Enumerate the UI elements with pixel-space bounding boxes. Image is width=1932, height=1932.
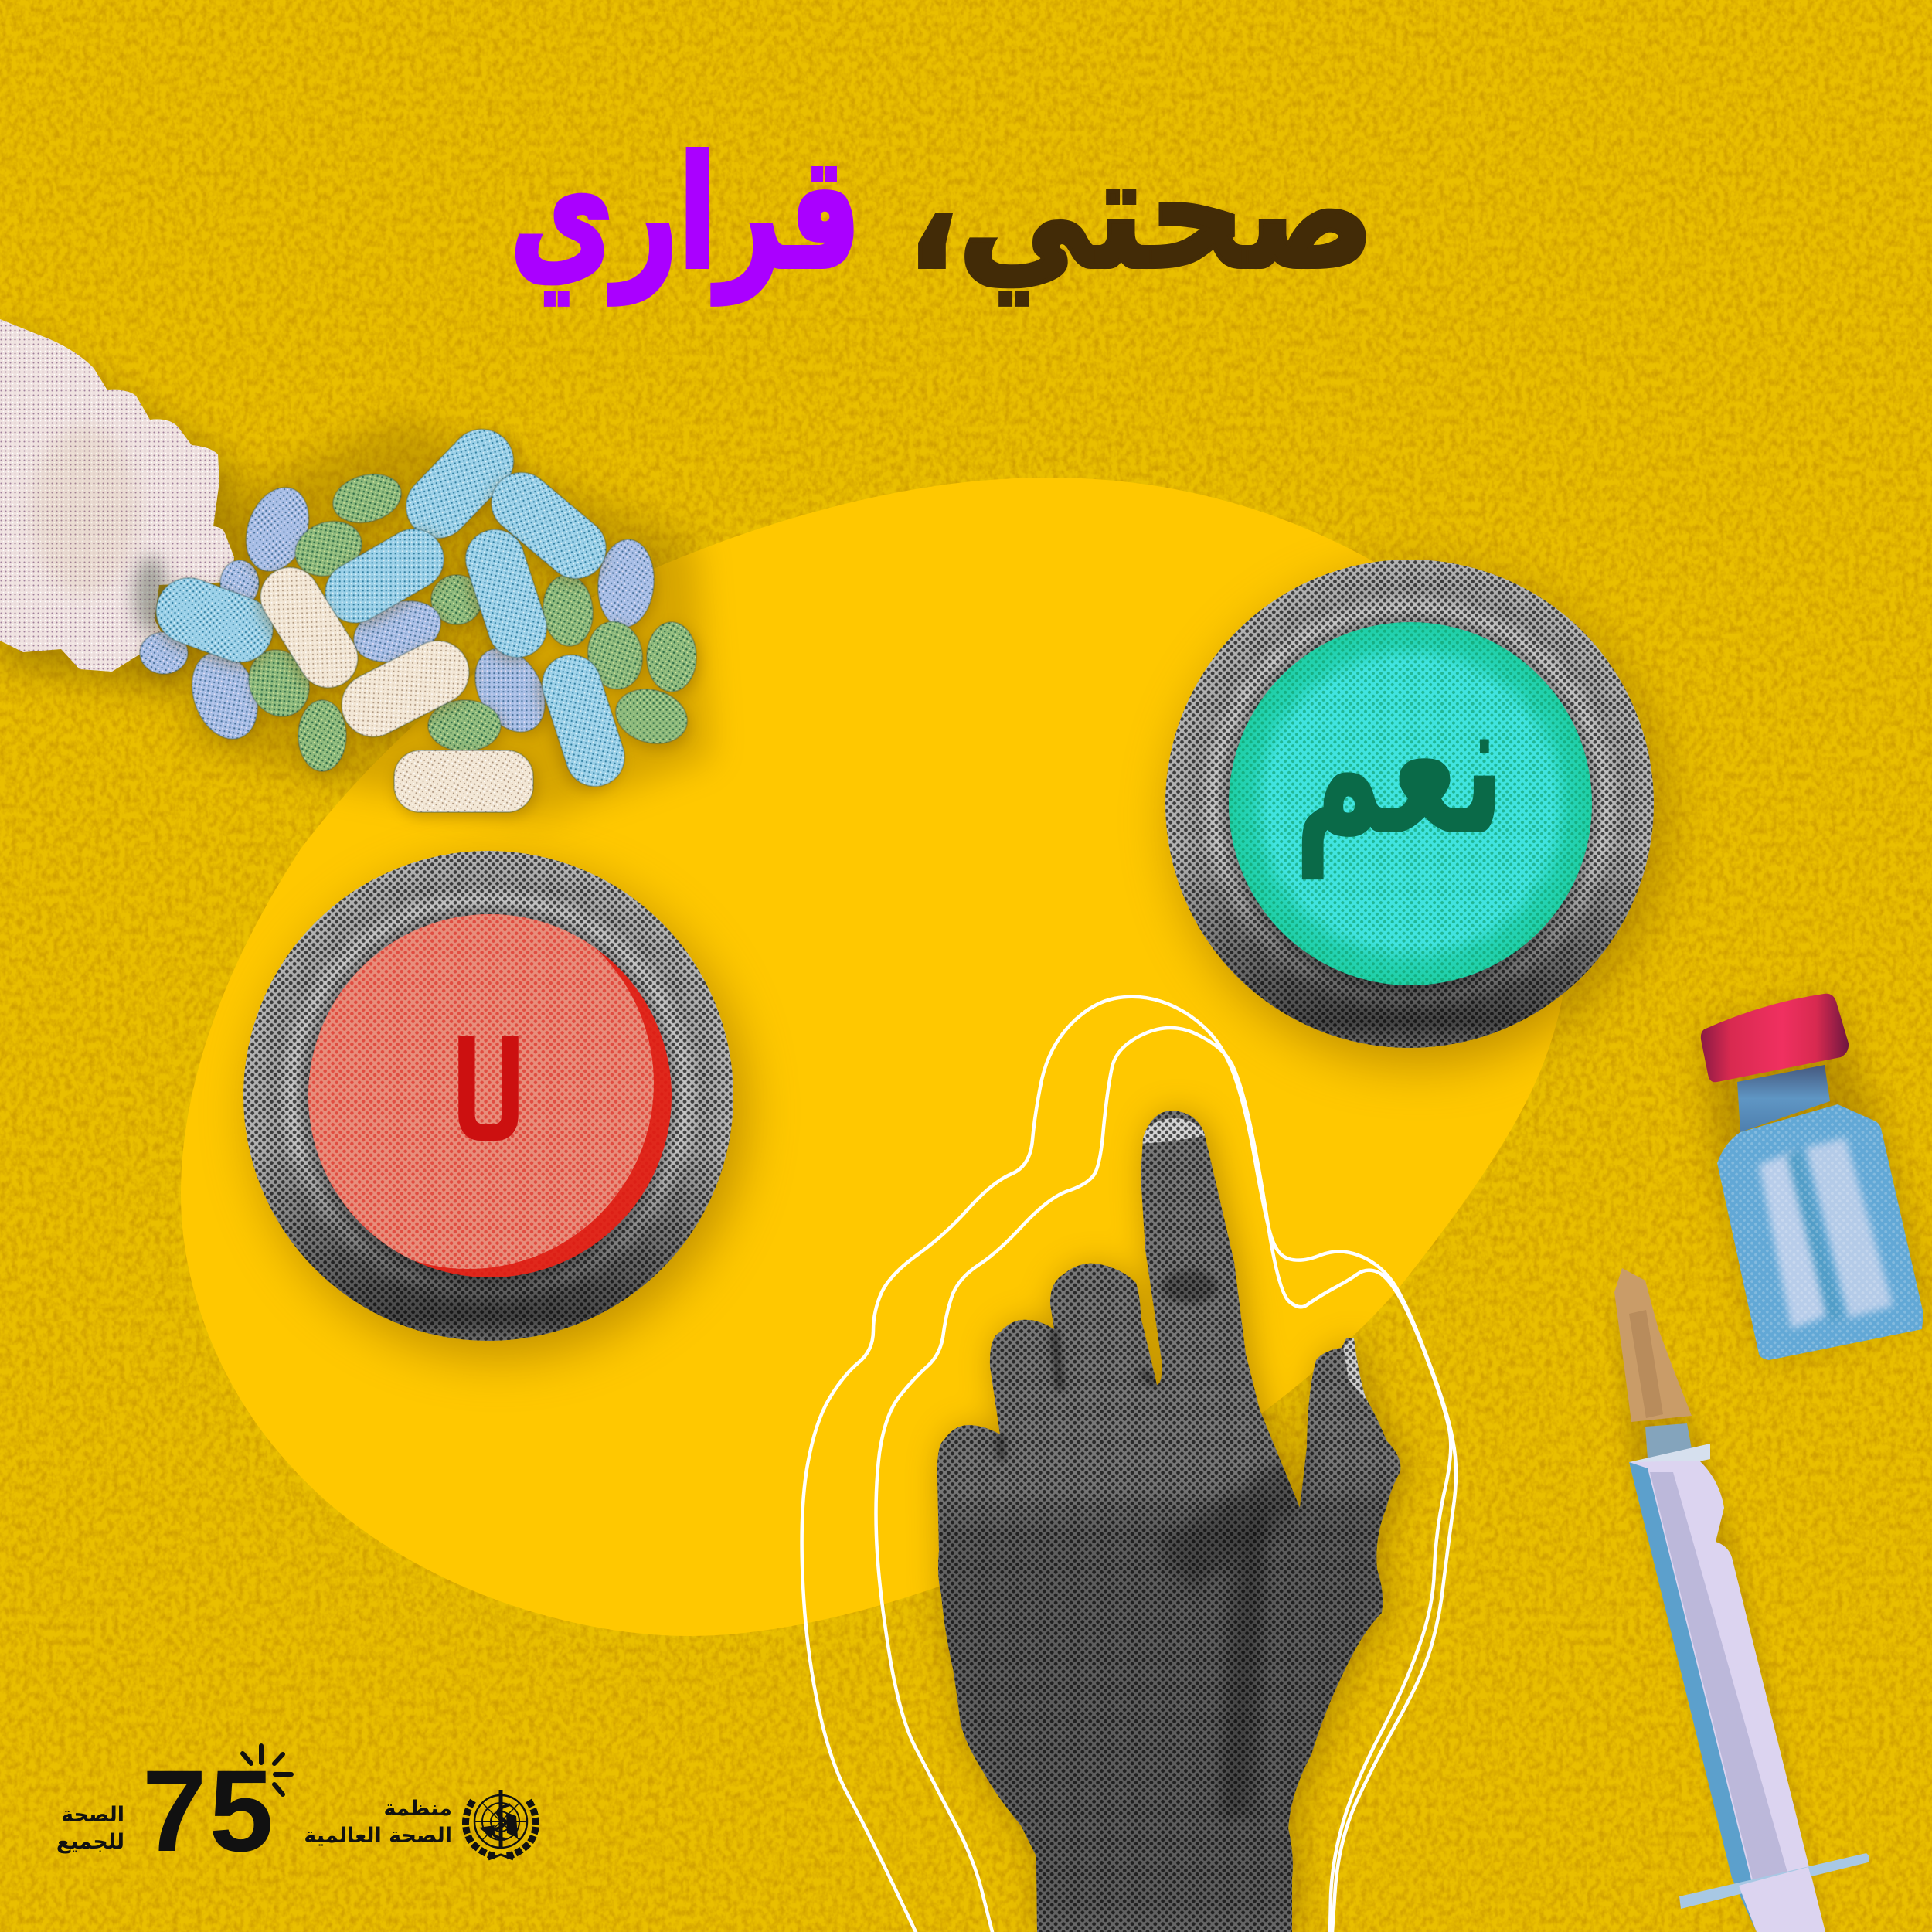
logo text xyxy=(304,1797,452,1848)
blue capsules xyxy=(147,417,632,794)
cream capsules xyxy=(250,556,533,812)
vial body xyxy=(1717,1104,1923,1360)
logo text: منظمة xyxy=(383,1797,452,1821)
icon: sun rays xyxy=(243,1746,291,1794)
pill bottle xyxy=(0,319,711,819)
title word: my health: صحتي، xyxy=(907,124,1375,304)
logo number: 75 xyxy=(142,1746,276,1876)
blob: bright yellow backdrop xyxy=(181,478,1564,1636)
logo: health for all xyxy=(56,1803,124,1854)
hand shadow xyxy=(942,1114,1405,1932)
button: no (red) xyxy=(243,851,743,1355)
button label: yes: نعم xyxy=(1294,653,1505,879)
vial cap xyxy=(1701,994,1849,1082)
syringe shadow xyxy=(1614,1292,1825,1932)
button face xyxy=(1229,622,1592,985)
hand outline lines xyxy=(802,997,1456,1932)
vial neck xyxy=(1737,1065,1830,1132)
hand pressing xyxy=(927,1105,1414,1932)
title word: my decision: قراري xyxy=(510,124,861,304)
syringe top flange xyxy=(1629,1444,1710,1475)
syringe hub xyxy=(1645,1423,1692,1459)
pills spilled from bottle xyxy=(140,417,696,812)
logo text: الصحة العالمية xyxy=(304,1824,452,1848)
periwinkle ovals and green tablets (rear) xyxy=(140,467,696,771)
logo text: للجميع xyxy=(56,1830,124,1854)
title xyxy=(510,124,1375,304)
button label: no: لا xyxy=(448,1017,529,1170)
button shadow xyxy=(255,867,743,1355)
logo: 75 years xyxy=(142,1746,291,1876)
icon: syringe xyxy=(1614,1268,1869,1932)
logo text: الصحة xyxy=(61,1803,124,1827)
button: yes (green) xyxy=(1165,560,1663,1063)
button ring xyxy=(243,851,733,1341)
logo: World Health Organization xyxy=(304,1790,536,1859)
icon: vial xyxy=(1701,994,1923,1360)
button ring xyxy=(1165,560,1654,1048)
syringe bottom flange xyxy=(1679,1853,1869,1909)
syringe barrel xyxy=(1629,1461,1825,1932)
button shadow xyxy=(1175,575,1663,1063)
syringe needle cap xyxy=(1614,1268,1692,1422)
icon: WHO emblem xyxy=(465,1790,536,1859)
hand body xyxy=(927,1105,1414,1932)
vial shadow xyxy=(1701,994,1923,1360)
button face xyxy=(308,914,672,1277)
